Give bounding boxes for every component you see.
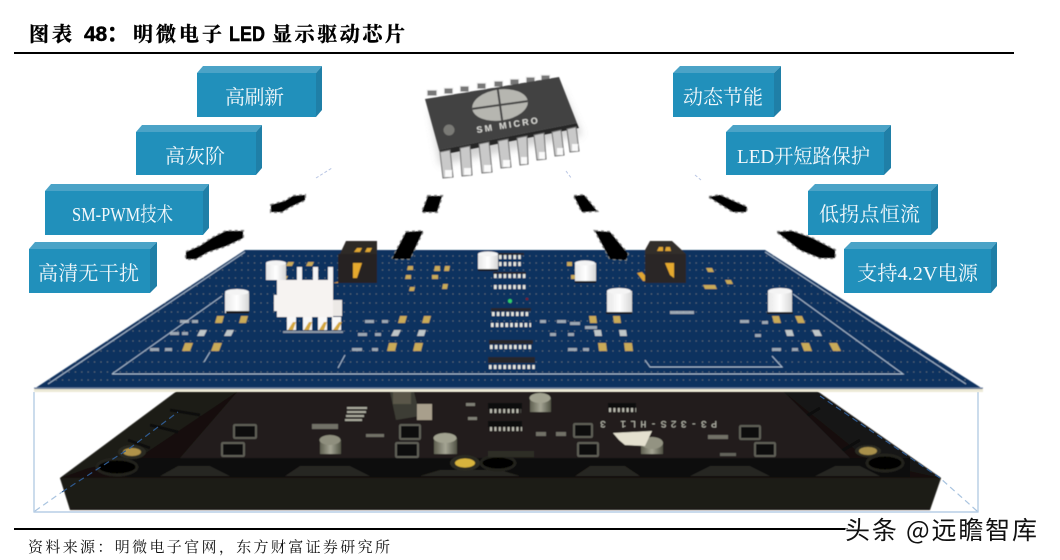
callout: SM-PWM技术 <box>45 184 209 235</box>
chip mid left <box>186 231 243 259</box>
callout: 支持4.2V电源: 支持4.2V电源 <box>857 262 979 285</box>
chip label: SM MICRO <box>476 115 539 135</box>
front ledge <box>120 458 910 477</box>
white power connector <box>274 267 343 333</box>
ring holes <box>97 455 903 475</box>
ledge texture <box>160 466 880 476</box>
chip mid right <box>777 231 835 258</box>
PCB traces <box>34 252 983 388</box>
title: 48： <box>84 23 128 46</box>
chip top centre left <box>422 196 442 212</box>
guide dashes <box>316 168 701 180</box>
source note: 资料来源：明微电子官网，东方财富证券研究所 <box>28 536 390 557</box>
left side rail <box>60 391 238 478</box>
module outer frame <box>60 391 941 510</box>
callout: 支持4.2V电源 <box>844 242 997 293</box>
chip top left <box>271 195 305 212</box>
chip logo <box>470 85 530 125</box>
floating chips <box>186 195 835 260</box>
chip mid centre left <box>392 231 423 259</box>
callout: LED开短路保护 <box>726 125 891 175</box>
centre ICs <box>488 253 535 367</box>
callout: 动态节能: 动态节能 <box>683 86 763 109</box>
callout: 高清无干扰: 高清无干扰 <box>38 262 139 285</box>
callout: 低拐点恒流 <box>808 184 938 235</box>
black header left <box>333 241 377 283</box>
PCB dots <box>30 256 990 380</box>
title: 图表 <box>29 18 72 47</box>
chip shadow <box>430 90 582 165</box>
callout: 高清无干扰 <box>29 242 157 293</box>
pin header connector <box>390 392 432 420</box>
title: 明微电子 <box>133 18 222 47</box>
callout: 高灰阶: 高灰阶 <box>165 145 225 168</box>
PCB edge <box>34 389 983 392</box>
gold pads <box>150 262 841 351</box>
title rule <box>14 52 1014 54</box>
callout: 高刷新: 高刷新 <box>225 86 284 109</box>
module guide outline <box>34 392 978 512</box>
brass screw inserts <box>118 445 881 471</box>
callout: SM-PWM技术: SM-PWM技术 <box>72 203 173 226</box>
callout: LED开短路保护: LED开短路保护 <box>737 145 870 168</box>
rail ribs <box>128 408 860 452</box>
chip mid centre right <box>595 231 628 260</box>
back pins <box>427 75 550 96</box>
chip pin-one dot <box>444 124 454 136</box>
pin feet <box>445 144 578 177</box>
black header right <box>637 241 686 283</box>
right side rail <box>783 391 941 478</box>
title <box>29 18 405 47</box>
board version text: P3-32S-HL1 3 <box>600 417 717 428</box>
SM MICRO chip <box>425 75 582 178</box>
callout: 高刷新 <box>197 66 322 117</box>
front pins <box>440 127 579 178</box>
chip top right <box>709 195 747 212</box>
watermark: 头条 @远瞻智库 <box>845 511 1037 547</box>
lower module: LED cabinet photo <box>60 391 941 510</box>
PCB panel <box>30 241 990 392</box>
white capacitors <box>225 252 793 314</box>
chip top centre right <box>574 195 597 212</box>
board ICs <box>488 403 636 457</box>
front face <box>60 478 941 509</box>
status LEDs <box>508 298 528 303</box>
PCB surface <box>34 250 983 389</box>
silkscreen logo <box>613 431 652 446</box>
callout: 高灰阶 <box>136 125 262 175</box>
title: 显示驱动芯片 <box>272 18 405 47</box>
title: LED <box>229 23 265 46</box>
silkscreen marks <box>312 403 736 456</box>
board chips <box>222 424 775 457</box>
chip body <box>425 77 577 150</box>
callout: 低拐点恒流: 低拐点恒流 <box>819 203 920 226</box>
callout: 动态节能 <box>673 66 781 117</box>
electrolytic capacitors <box>320 393 663 454</box>
circuit board <box>180 391 850 458</box>
footer rule <box>14 528 848 530</box>
